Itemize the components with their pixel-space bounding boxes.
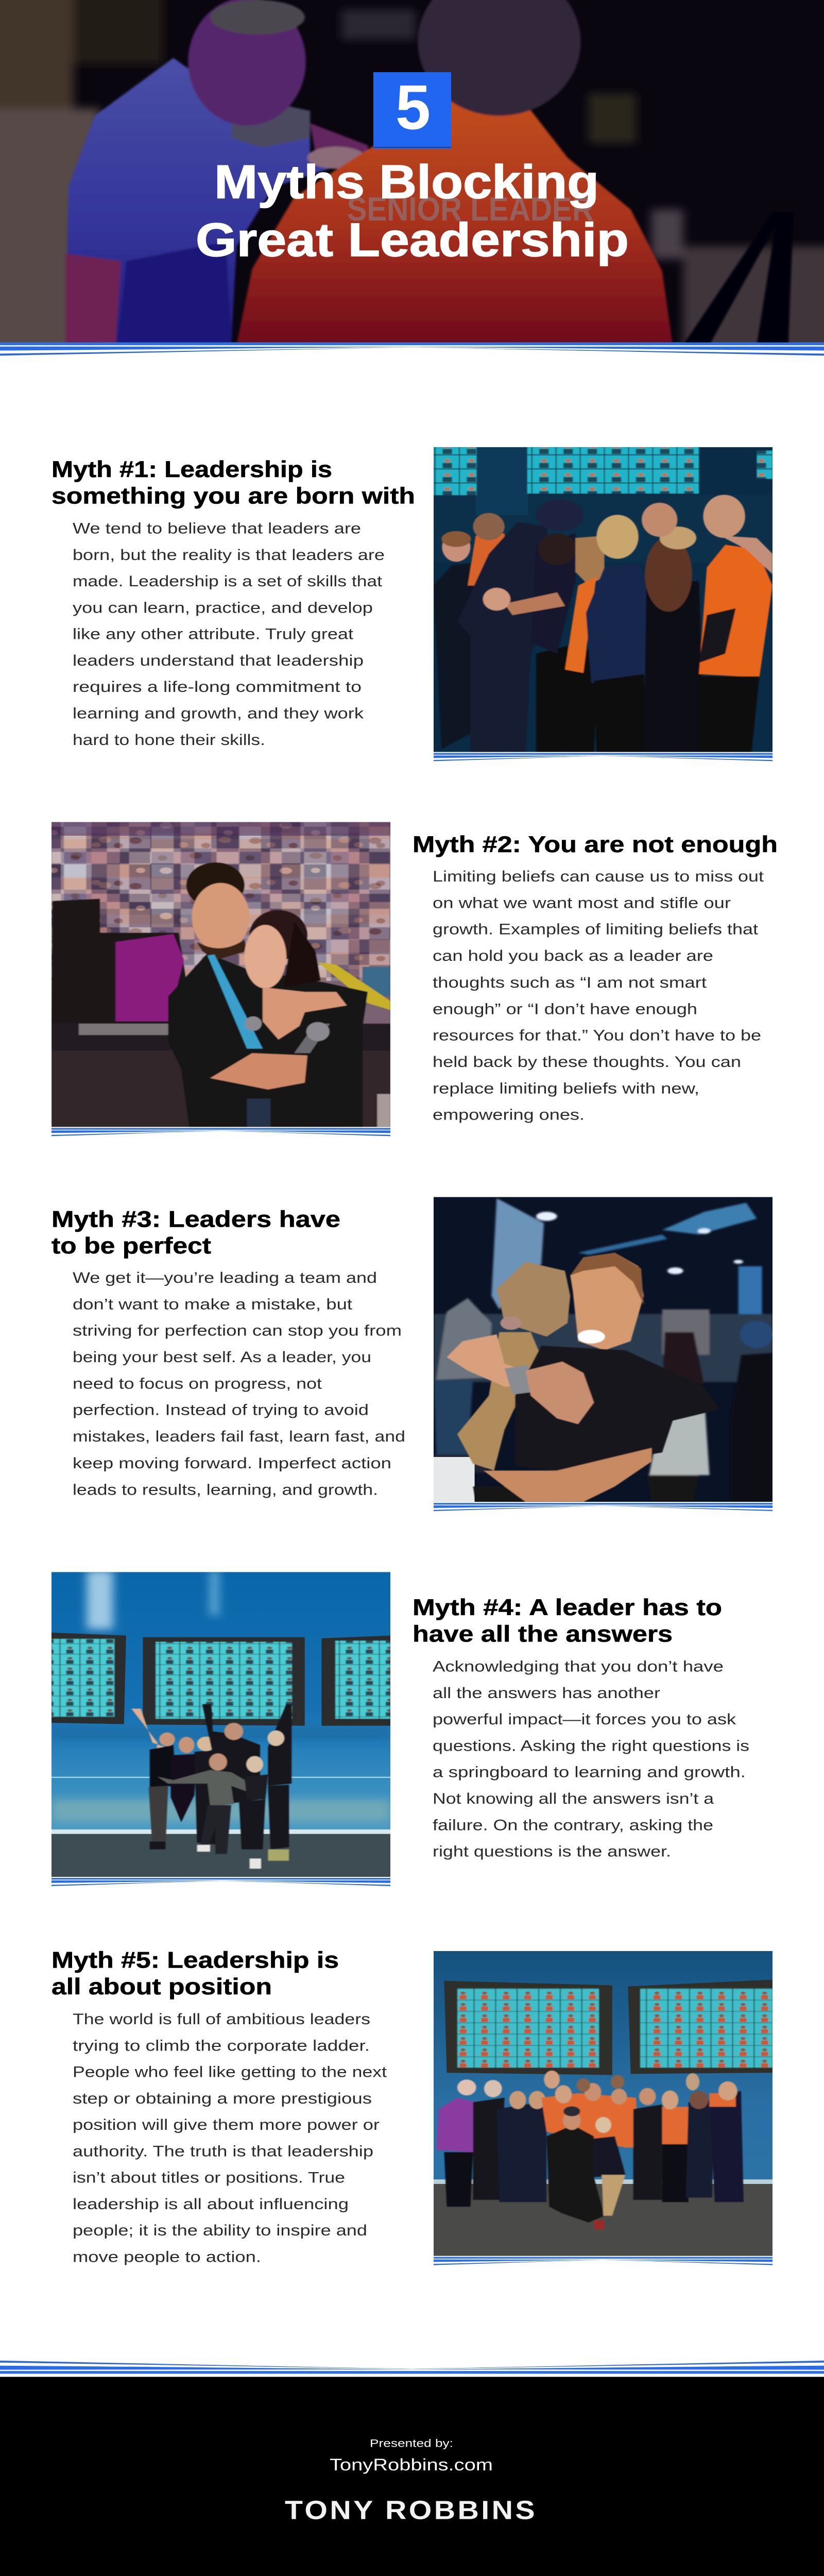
body text: myth 2: can hold you back as a leader are <box>433 947 713 964</box>
body text: myth 4: Acknowledging that you don’t have <box>433 1658 724 1675</box>
heading: myth 5: all about position <box>52 1974 272 1999</box>
body text: myth 4: a springboard to learning and growth. <box>433 1764 746 1781</box>
body text: myth 1: learning and growth, and they work <box>73 705 364 722</box>
body text: myth 3: keep moving forward. Imperfect action <box>73 1455 391 1472</box>
header ribbon <box>0 343 824 355</box>
body text: myth 3: being your best self. As a leader, you <box>73 1349 371 1366</box>
body text: myth 4: failure. On the contrary, asking the <box>433 1817 713 1834</box>
body text: myth 2: thoughts such as “I am not smart <box>433 974 707 991</box>
photo: smiling couple hugging <box>52 822 390 1127</box>
header panel <box>0 0 824 355</box>
body text: myth 2: empowering ones. <box>433 1107 585 1124</box>
heading: myth 3: Myth #3: Leaders have <box>52 1207 340 1232</box>
body text: myth 5 <box>73 2011 387 2265</box>
body text: myth 4: all the answers has another <box>433 1685 660 1702</box>
photo ribbon <box>52 1128 390 1136</box>
body text: myth 3: mistakes, leaders fail fast, learn fast, and <box>73 1428 405 1445</box>
heading: myth 4 <box>413 1595 722 1647</box>
heading: myth 5: Myth #5: Leadership is <box>52 1948 339 1973</box>
body text: myth 5: isn’t about titles or positions. True <box>73 2170 345 2187</box>
body text: myth 2: replace limiting beliefs with new, <box>433 1080 699 1097</box>
heading: myth 1: Myth #1: Leadership is <box>52 457 332 482</box>
body text: myth 4 <box>433 1658 749 1860</box>
body text: myth 5: move people to action. <box>73 2249 261 2265</box>
photo ribbon <box>52 1878 390 1886</box>
body text: myth 2: Limiting beliefs can cause us to miss out <box>433 868 764 885</box>
body text: myth 5: people; it is the ability to inspire and <box>73 2222 367 2239</box>
body text: myth 1: requires a life-long commitment to <box>73 679 362 696</box>
title: Myths Blocking <box>214 155 599 208</box>
body text: myth 5: step or obtaining a more prestigious <box>73 2090 372 2107</box>
body text: myth 5: leadership is all about influencing <box>73 2196 349 2213</box>
header photo: two men at an event <box>0 0 824 343</box>
heading: myth 1: something you are born with <box>52 484 415 509</box>
shirt lettering in photo: SENIOR LEADER <box>347 191 594 228</box>
body text: myth 3: need to focus on progress, not <box>73 1375 322 1392</box>
body text: myth 4: right questions is the answer. <box>433 1843 671 1860</box>
body text: myth 1: like any other attribute. Truly great <box>73 626 354 643</box>
body text: myth 1: born, but the reality is that leaders are <box>73 547 385 564</box>
logo wordmark: TONY ROBBINS <box>285 2495 537 2524</box>
body text: myth 1: made. Leadership is a set of skills that <box>73 573 383 590</box>
photo: two people embracing in a crowd <box>434 1197 772 1502</box>
body text: myth 3: We get it—you’re leading a team and <box>73 1269 377 1286</box>
body text: myth 1 <box>73 520 385 749</box>
number badge: 5 <box>396 73 431 143</box>
panel: myth 2 <box>52 822 778 1136</box>
panel: myth 5 <box>52 1948 772 2265</box>
photo: team group hug under video wall <box>434 447 772 752</box>
footer panel <box>0 2377 824 2576</box>
body text: myth 5: The world is full of ambitious leaders <box>73 2011 370 2028</box>
body text: myth 1: hard to hone their skills. <box>73 732 265 749</box>
body text: myth 5: trying to climb the corporate ladder. <box>73 2037 370 2054</box>
body text: myth 4: questions. Asking the right questions is <box>433 1738 749 1754</box>
panel: myth 3 <box>52 1197 774 1511</box>
panel: myth 4 <box>52 1570 749 1886</box>
number badge <box>373 72 451 149</box>
heading: myth 1 <box>52 457 415 509</box>
website: TonyRobbins.com <box>330 2455 493 2474</box>
body text: myth 3: leads to results, learning, and growth. <box>73 1482 378 1498</box>
body text: myth 3: don’t want to make a mistake, but <box>73 1296 353 1313</box>
heading: myth 4: have all the answers <box>413 1622 673 1647</box>
title <box>196 155 629 266</box>
body text: myth 1: We tend to believe that leaders are <box>73 520 361 537</box>
body text: myth 1: you can learn, practice, and develop <box>73 600 373 616</box>
body text: myth 5: authority. The truth is that leadership <box>73 2143 373 2160</box>
photo ribbon <box>434 2257 772 2265</box>
body text: myth 3: striving for perfection can stop you from <box>73 1323 402 1340</box>
body text: myth 5: position will give them more power or <box>73 2116 380 2133</box>
body text: myth 2: on what we want most and stifle our <box>433 895 731 911</box>
photo: team cheering on stage <box>52 1572 390 1877</box>
body text: myth 2 <box>433 868 764 1124</box>
body text: myth 4: Not knowing all the answers isn’t a <box>433 1790 714 1807</box>
heading: myth 4: Myth #4: A leader has to <box>413 1595 722 1620</box>
heading: myth 3: to be perfect <box>52 1233 211 1259</box>
body text: myth 2: resources for that.” You don’t have to be <box>433 1027 761 1044</box>
heading: myth 2: Myth #2: You are not enough <box>413 832 778 857</box>
body text: myth 2: growth. Examples of limiting beliefs that <box>433 921 759 938</box>
body text: myth 4: powerful impact—it forces you to ask <box>433 1711 736 1728</box>
body text: myth 1: leaders understand that leadership <box>73 652 364 669</box>
photo ribbon <box>434 1503 772 1511</box>
body text: myth 3 <box>73 1269 405 1498</box>
panel: myth 1 <box>52 447 772 761</box>
title: Great Leadership <box>196 213 629 266</box>
body text: myth 3: perfection. Instead of trying to avoid <box>73 1402 369 1418</box>
heading: myth 5 <box>52 1948 339 1999</box>
presented by label: Presented by: <box>370 2437 453 2449</box>
heading: myth 3 <box>52 1207 340 1259</box>
body text: myth 5: People who feel like getting to the next <box>73 2064 387 2081</box>
photo: large team group portrait <box>434 1951 772 2256</box>
footer ribbon <box>0 2361 824 2374</box>
body text: myth 2: enough” or “I don’t have enough <box>433 1001 697 1018</box>
body text: myth 2: held back by these thoughts. You can <box>433 1054 741 1071</box>
photo ribbon <box>434 753 772 761</box>
